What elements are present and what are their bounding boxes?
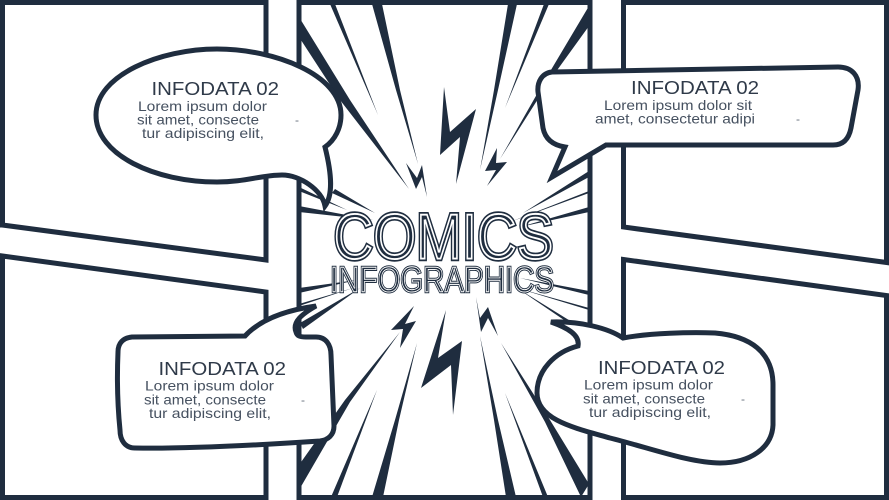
heading: INFODATA 02 [152,78,279,99]
body text: Lorem ipsum dolor sit [604,98,752,113]
icon: big lightning bottom [421,310,462,415]
body text: sit amet, consecte [137,112,259,128]
panel: top-left frame [0,2,266,260]
heading: INFODATA 02 [158,358,286,379]
title: COMICS: COMICS [334,200,554,273]
icon: big lightning top [440,87,476,184]
body text: tur adipiscing elit, [589,405,711,420]
burst rays [299,4,589,497]
heading: INFODATA 02 [598,357,725,378]
title: COMICS: COMICS [334,200,554,273]
body text [583,378,745,420]
body text: tur adipiscing elit, [142,126,264,141]
icon: small lightning top left [406,163,427,197]
callout: top-right speech bubble [538,67,858,177]
bubble shape [537,322,773,463]
body text: Lorem ipsum dolor [584,378,713,392]
title: INFOGRAPHICS: INFOGRAPHICS [330,259,554,300]
body text: - [796,112,800,126]
body text: - [301,393,305,407]
icon: small lightning bottom right [476,297,498,336]
panel: bottom-right frame [624,260,886,498]
icon: small lightning top right [485,148,507,186]
body text: tur adipiscing elit, [149,406,271,421]
icon: small lightning bottom left [391,306,416,348]
body text: sit amet, consecte [583,392,705,406]
title: COMICS [334,211,553,262]
body text: - [741,392,745,406]
callout: bottom-left speech bubble [117,306,334,448]
bubble shape [96,49,341,206]
callout: bottom-right speech bubble [537,322,773,463]
bubble shape [538,67,858,177]
panel: center frame [299,2,590,498]
title: INFOGRAPHICS [332,265,554,294]
body text [144,378,305,421]
panel: bottom-left frame [2,256,266,498]
body text: sit amet, consecte [144,392,266,408]
title: INFOGRAPHICS: INFOGRAPHICS [330,259,554,300]
panel: top-right frame [624,2,886,262]
body text [137,99,299,141]
heading: INFODATA 02 [631,77,759,98]
title: COMICS: COMICS [334,200,554,273]
bubble shape [117,306,334,448]
body text [595,98,800,126]
body text: Lorem ipsum dolor [138,99,267,114]
title: INFOGRAPHICS: INFOGRAPHICS [330,259,554,300]
body text: - [295,113,299,127]
body text: amet, consectetur adipi [595,112,755,126]
body text: Lorem ipsum dolor [145,378,274,394]
callout: top-left speech bubble [96,49,341,206]
